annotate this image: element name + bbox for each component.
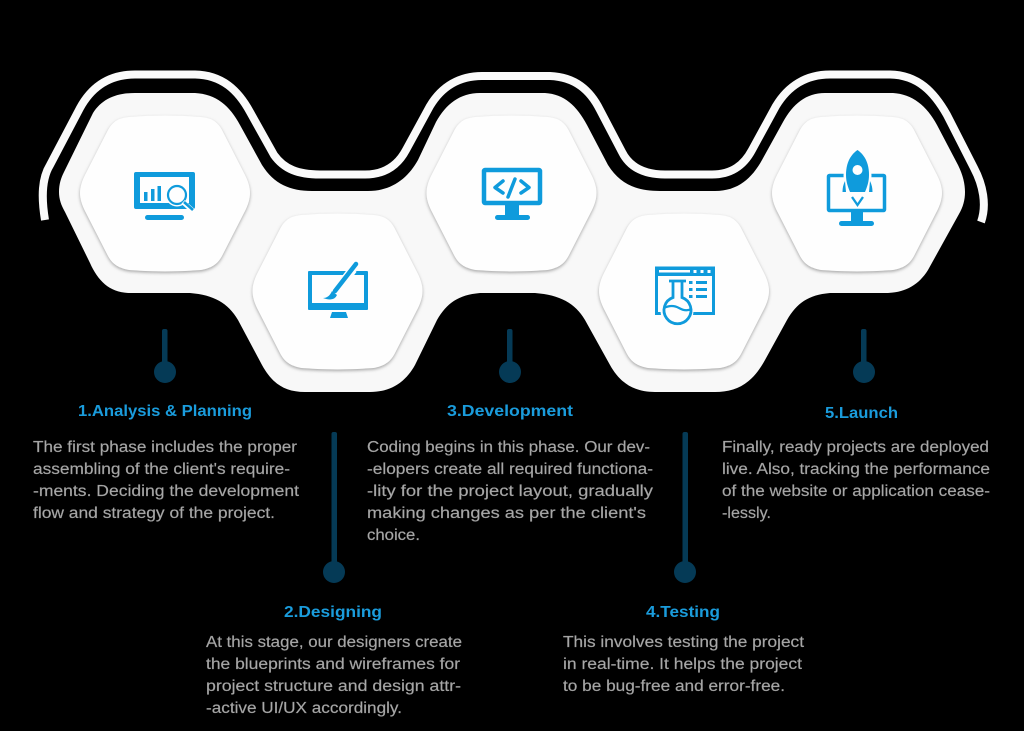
pin 1 (154, 329, 176, 383)
outer white hexagon band (59, 93, 965, 392)
icon: monitor with code brackets (484, 170, 540, 220)
heading: step 1: 1.Analysis & Planning (78, 403, 252, 420)
hexagon 3 tile (426, 116, 596, 272)
icon: monitor with paint brush (308, 264, 368, 318)
body: step 5: -lessly. (722, 505, 771, 522)
hexagon 5 tile (772, 116, 942, 272)
pin 2 (323, 432, 345, 583)
body: step 2: project structure and design attr- (206, 678, 461, 695)
step 4 text (563, 604, 805, 695)
hexagon 2: designing (252, 214, 422, 370)
outer curved outline stroke (43, 74, 984, 222)
body: step 3 (367, 439, 653, 544)
heading: step 5: 5.Launch (825, 405, 898, 422)
heading: step 4: 4.Testing (646, 604, 720, 621)
icon: monitor with rocket (828, 150, 884, 226)
hexagon 2 tile (252, 214, 422, 370)
pin 4 (674, 432, 696, 583)
body: step 4: in real-time. It helps the project (563, 656, 803, 673)
hexagon 1: analysis (80, 116, 250, 272)
heading: step 3: 3.Development (447, 403, 574, 420)
body: step 3: -elopers create all required functiona- (367, 461, 653, 478)
body: step 1 (33, 439, 300, 522)
body: step 5: live. Also, tracking the performance (722, 461, 990, 478)
body: step 3: choice. (367, 527, 420, 544)
heading: step 2: 2.Designing (284, 604, 382, 621)
step 3 text (367, 403, 653, 544)
body: step 1: flow and strategy of the project. (33, 505, 275, 522)
body: step 2: At this stage, our designers create (206, 634, 462, 651)
step 1 text (33, 403, 300, 522)
icon: monitor with chart and magnifier (134, 172, 195, 220)
pin 3 (499, 329, 521, 383)
hexagon 1 tile (80, 116, 250, 272)
body: step 3: Coding begins in this phase. Our dev- (367, 439, 650, 456)
step 5 text (722, 405, 990, 522)
body: step 4 (563, 634, 805, 695)
icon: browser window with flask (655, 267, 715, 328)
body: step 5: of the website or application cease- (722, 483, 990, 500)
body: step 2: -active UI/UX accordingly. (206, 700, 402, 717)
step 2 text (206, 604, 462, 717)
body: step 4: This involves testing the project (563, 634, 805, 651)
body: step 1: The first phase includes the proper (33, 439, 297, 456)
body: step 4: to be bug-free and error-free. (563, 678, 785, 695)
hexagon 3: development (426, 116, 596, 272)
body: step 1: assembling of the client's require- (33, 461, 290, 478)
hexagon 5: launch (772, 116, 942, 272)
hexagon 4: testing (599, 214, 769, 370)
body: step 3: making changes as per the client's (367, 505, 646, 522)
body: step 2 (206, 634, 462, 717)
hexagon 4 tile (599, 214, 769, 370)
body: step 1: -ments. Deciding the development (33, 483, 300, 500)
body: step 3: -lity for the project layout, gradually (367, 483, 653, 500)
body: step 5: Finally, ready projects are deployed (722, 439, 989, 456)
body: step 5 (722, 439, 990, 522)
body: step 2: the blueprints and wireframes for (206, 656, 460, 673)
pin 5 (853, 329, 875, 383)
